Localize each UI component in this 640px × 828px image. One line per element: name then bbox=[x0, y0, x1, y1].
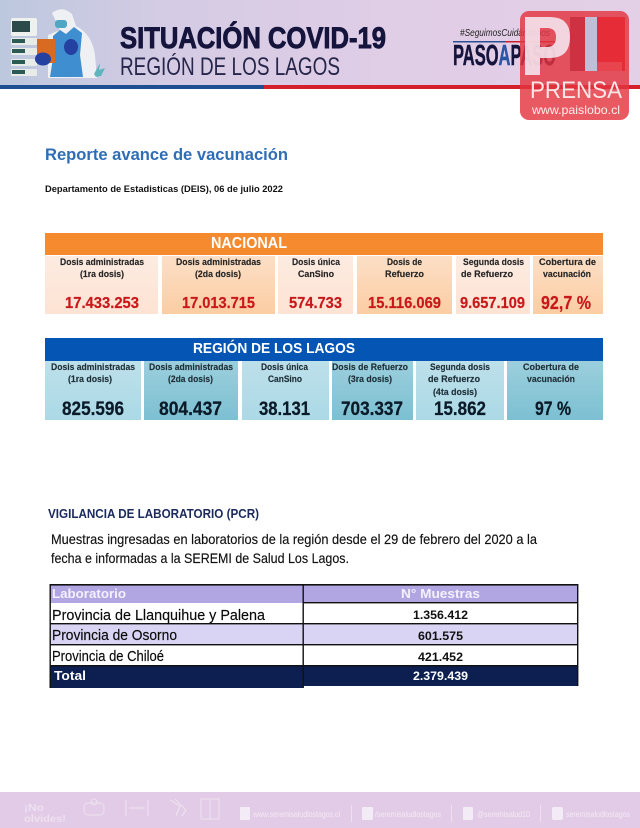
contact: twitter: @seremisalud10 bbox=[477, 810, 530, 819]
stat: dosis unica region: Dosis única bbox=[261, 362, 309, 373]
contact: facebook bbox=[362, 807, 441, 820]
watermark: PL Prensa: PRENSA bbox=[530, 77, 622, 104]
stat: primera dosis bbox=[45, 256, 158, 314]
table row: total bbox=[54, 668, 468, 683]
heading: vigilancia de laboratorio: VIGILANCIA DE LABORATORIO (PCR) bbox=[48, 506, 259, 521]
table row: Chiloe bbox=[52, 649, 463, 665]
stat: segunda dosis de refuerzo region: Segunda dosis bbox=[430, 362, 490, 373]
contact: instagram bbox=[552, 807, 630, 820]
text block: muestras: fecha e informadas a la SEREMI de Salud Los Lagos. bbox=[51, 550, 349, 566]
stat: refuerzo region: (3ra dosis) bbox=[348, 374, 392, 385]
stat: cobertura: Cobertura de bbox=[539, 257, 596, 268]
stat: refuerzo: Refuerzo bbox=[385, 269, 424, 280]
stat: refuerzo region bbox=[332, 361, 413, 420]
contact: web bbox=[240, 807, 340, 820]
stat: refuerzo region: 703.337 bbox=[341, 399, 403, 420]
stat: dosis unica: Dosis única bbox=[292, 257, 341, 268]
contact: facebook: /seremisaludlostagos bbox=[375, 810, 441, 819]
logo: Paso a Paso bbox=[453, 28, 556, 72]
stat: segunda dosis region: (2da dosis) bbox=[168, 374, 213, 385]
title: SITUACIÓN COVID-19 bbox=[120, 21, 386, 55]
text: no olvides: ¡No bbox=[24, 803, 44, 814]
table header: Laboratorio bbox=[52, 586, 126, 601]
text: no olvides bbox=[24, 803, 66, 825]
icon: lavado de manos bbox=[170, 799, 186, 816]
stat: dosis unica bbox=[278, 256, 353, 314]
title bbox=[120, 21, 386, 81]
footer band bbox=[0, 792, 640, 828]
icon: ventilar bbox=[201, 799, 219, 819]
table: muestras por provincia bbox=[50, 584, 578, 688]
stat: segunda dosis de refuerzo region: de Refuerzo bbox=[428, 374, 480, 385]
stat: primera dosis region: (1ra dosis) bbox=[68, 374, 112, 385]
stat: refuerzo: 15.116.069 bbox=[368, 295, 441, 312]
logo: Seremi de Salud bbox=[570, 17, 625, 71]
stat: segunda dosis de refuerzo region bbox=[416, 361, 504, 420]
title: REGIÓN DE LOS LAGOS bbox=[120, 52, 340, 81]
table row: total: 2.379.439 bbox=[413, 669, 468, 683]
table row: Llanquihue y Palena: 1.356.412 bbox=[413, 608, 468, 622]
stat: primera dosis region: 825.596 bbox=[62, 399, 124, 420]
stat: cobertura: 92,7 % bbox=[541, 293, 591, 313]
stat: primera dosis region bbox=[45, 361, 141, 420]
text: no olvides: olvides! bbox=[24, 814, 66, 825]
table row: Osorno bbox=[52, 628, 463, 644]
heading: nacional: NACIONAL bbox=[211, 235, 287, 252]
stat: cobertura bbox=[533, 256, 603, 314]
header banner bbox=[0, 0, 640, 89]
table row: Osorno: Provincia de Osorno bbox=[52, 628, 177, 644]
table row: Chiloe: 421.452 bbox=[418, 650, 463, 664]
stat: segunda dosis de refuerzo bbox=[456, 256, 530, 314]
stat: segunda dosis region: Dosis administradas bbox=[149, 362, 233, 373]
stat: primera dosis: 17.433.253 bbox=[65, 295, 139, 312]
contact: twitter bbox=[463, 807, 530, 820]
table row: total: Total bbox=[54, 668, 86, 683]
text block: muestras: Muestras ingresadas en laboratorios de la región desde el 29 de febrero del 2020 a la bbox=[51, 531, 537, 547]
stat: refuerzo region: Dosis de Refuerzo bbox=[332, 362, 408, 373]
stat: cobertura region bbox=[507, 361, 603, 420]
panel: region de los lagos bbox=[45, 338, 603, 420]
icon: mascarilla bbox=[84, 799, 104, 815]
text block: muestras bbox=[51, 531, 537, 566]
logo: Paso a Paso: #SeguimosCuidándonos bbox=[460, 28, 550, 39]
stat: segunda dosis de refuerzo: 9.657.109 bbox=[460, 295, 525, 312]
stat: primera dosis region: Dosis administradas bbox=[51, 362, 135, 373]
stat: segunda dosis region bbox=[144, 361, 238, 420]
stat: refuerzo: Dosis de bbox=[387, 257, 422, 268]
table row: Chiloe: Provincia de Chiloé bbox=[52, 649, 164, 665]
heading: region de los lagos: REGIÓN DE LOS LAGOS bbox=[193, 339, 355, 357]
stat: segunda dosis: (2da dosis) bbox=[195, 269, 241, 280]
stat: primera dosis: (1ra dosis) bbox=[80, 269, 124, 280]
watermark: PL Prensa: www.paislobo.cl bbox=[531, 103, 620, 117]
stat: segunda dosis de refuerzo: de Refuerzo bbox=[461, 269, 513, 280]
table header bbox=[52, 586, 480, 601]
contact: web: www.seremisaludlostagos.cl bbox=[252, 810, 340, 819]
table row: Osorno: 601.575 bbox=[418, 629, 463, 643]
heading: Reporte avance de vacunación: Reporte avance de vacunación bbox=[45, 145, 288, 164]
stat: primera dosis: Dosis administradas bbox=[60, 257, 144, 268]
source line: Departamento de Estadisticas (DEIS), 06 de julio 2022 bbox=[45, 184, 283, 195]
stat: dosis unica region: CanSino bbox=[268, 374, 302, 385]
logo: Paso a Paso: PASOAPASO bbox=[453, 40, 556, 72]
stat: dosis unica region bbox=[242, 361, 329, 420]
stat: segunda dosis de refuerzo region: (4ta dosis) bbox=[433, 387, 477, 398]
stat: dosis unica region: 38.131 bbox=[259, 399, 310, 420]
stat: segunda dosis region: 804.437 bbox=[159, 399, 222, 420]
stat: cobertura region: vacunación bbox=[527, 374, 575, 385]
table row: Llanquihue y Palena bbox=[52, 608, 468, 624]
contact: instagram: seremisaludlostagos bbox=[566, 810, 630, 819]
panel: nacional bbox=[45, 233, 603, 314]
stat: segunda dosis: 17.013.715 bbox=[182, 295, 255, 312]
stat: dosis unica: CanSino bbox=[298, 269, 334, 280]
stat: segunda dosis de refuerzo region: 15.862 bbox=[434, 399, 486, 420]
icon: distancia bbox=[126, 800, 148, 816]
table header: N° Muestras bbox=[401, 586, 480, 601]
table row: Llanquihue y Palena: Provincia de Llanquihue y Palena bbox=[52, 608, 266, 624]
stat: cobertura: vacunación bbox=[543, 269, 591, 280]
stat: cobertura region: Cobertura de bbox=[523, 362, 579, 373]
stat: refuerzo bbox=[357, 256, 452, 314]
stat: segunda dosis bbox=[162, 256, 275, 314]
stat: segunda dosis: Dosis administradas bbox=[176, 257, 261, 268]
icon: health worker illustration bbox=[11, 9, 105, 78]
watermark: PL Prensa bbox=[520, 11, 629, 120]
stat: cobertura region: 97 % bbox=[535, 399, 571, 420]
stat: segunda dosis de refuerzo: Segunda dosis bbox=[463, 257, 524, 268]
stat: dosis unica: 574.733 bbox=[289, 295, 342, 312]
